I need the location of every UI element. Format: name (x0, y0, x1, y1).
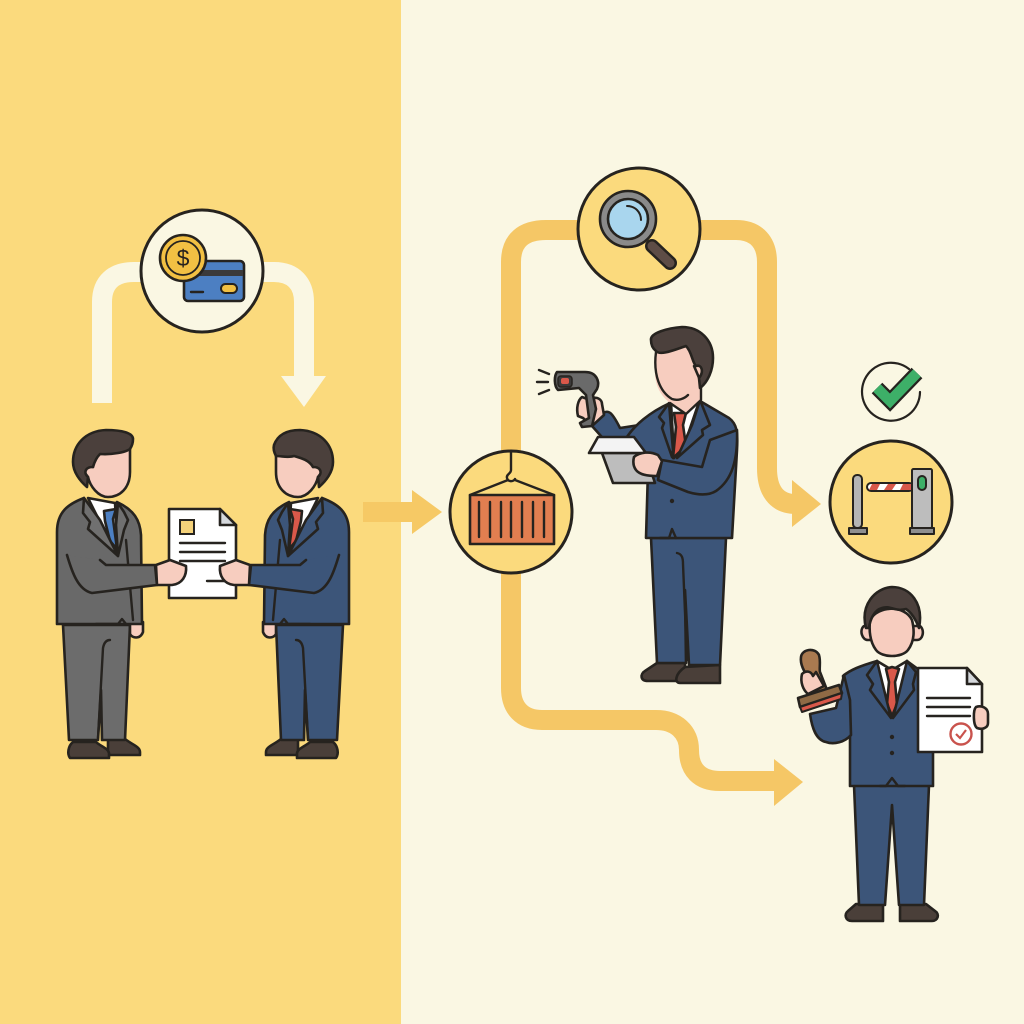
jacket hem (880, 778, 905, 786)
icon: shipping container (450, 451, 572, 573)
lapels (867, 661, 891, 718)
right hand (156, 560, 186, 585)
tie (886, 667, 899, 716)
jacket hem (660, 529, 676, 538)
customs officer with stamp and approved document (798, 587, 988, 921)
handle (652, 246, 670, 263)
jacket button (670, 499, 674, 503)
arrow: payment flow between the two businessmen (102, 272, 326, 407)
tablet (602, 453, 655, 483)
businessman in grey suit (57, 430, 186, 758)
trousers (854, 785, 929, 905)
arrow: from left panel to container (363, 490, 442, 534)
hair and ear (651, 327, 713, 388)
jacket (843, 661, 933, 786)
credit card (184, 261, 244, 301)
barrier arm (867, 483, 913, 491)
left hand (130, 622, 143, 638)
document exchanged (169, 509, 236, 598)
scan rays (537, 370, 549, 394)
icon: green check mark (862, 363, 920, 421)
shoes (642, 663, 685, 681)
control post (912, 469, 932, 528)
icon: coin and credit card (141, 210, 263, 332)
shirt and collar (288, 498, 318, 552)
trousers (63, 625, 130, 740)
businessman scanning with barcode scanner and tablet (537, 327, 737, 683)
approved document (918, 668, 982, 752)
face and neck (655, 345, 702, 414)
shoes (108, 738, 140, 755)
hair (73, 430, 133, 487)
stamp (798, 650, 842, 712)
shirt (671, 399, 700, 458)
businessman in navy suit (220, 430, 349, 758)
left hand (263, 622, 276, 638)
face (870, 609, 914, 656)
lapels (659, 403, 673, 457)
trousers (276, 625, 343, 740)
lapels (83, 498, 118, 556)
left post (853, 475, 862, 528)
jacket (625, 401, 737, 538)
arrow: inspection route via magnifier to gate (511, 230, 821, 527)
jacket (264, 498, 349, 624)
ears (861, 626, 923, 640)
document hand (974, 706, 988, 729)
face (276, 448, 321, 497)
tie (289, 509, 302, 549)
sleeve (249, 555, 339, 593)
hair (274, 430, 333, 487)
icon: magnifying glass (578, 168, 700, 290)
barcode scanner (555, 372, 598, 427)
raised sleeve (810, 675, 851, 743)
crane hook and cables (470, 452, 554, 495)
icon: checkpoint barrier gate (830, 441, 952, 563)
lens (600, 191, 656, 247)
trousers (651, 538, 726, 665)
sleeve (67, 555, 157, 593)
front hand (633, 453, 662, 476)
shoes (266, 738, 298, 755)
lapels (288, 498, 323, 556)
tie (104, 509, 117, 549)
shirt (877, 661, 907, 716)
raised sleeve (592, 412, 640, 450)
coin: $ (177, 245, 190, 271)
shirt and collar (88, 498, 118, 552)
arrow: direct route to customs officer (511, 565, 803, 806)
front sleeve (658, 430, 737, 494)
tie (673, 413, 686, 458)
scanner hand back (577, 397, 604, 426)
hair (865, 587, 920, 628)
stamp hand (801, 672, 824, 694)
jacket (57, 498, 142, 624)
shoes (846, 904, 883, 921)
right hand (220, 560, 250, 585)
container body (470, 495, 554, 544)
left panel background (0, 0, 401, 1024)
buttons (890, 735, 894, 739)
face (85, 448, 130, 497)
